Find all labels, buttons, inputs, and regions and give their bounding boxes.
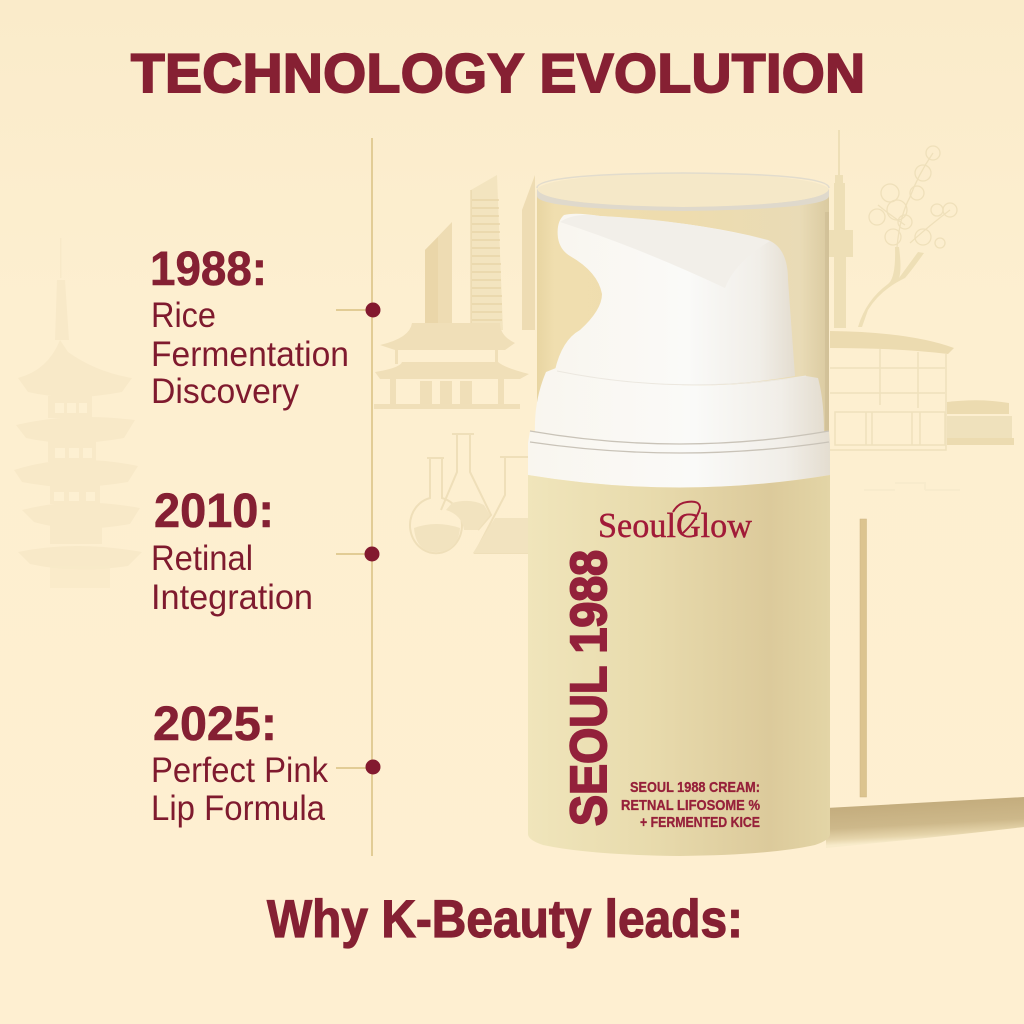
timeline entry: 2010: Retinal [151,539,253,578]
shadow of bottle [826,797,1024,848]
timeline entry: 1988: Discovery [151,372,299,411]
actuator seam [557,371,806,385]
vertical product label: SEOUL 1988 [560,550,617,826]
timeline entry: 2025: Lip Formula [151,789,325,828]
clear cap [537,173,829,445]
timeline entry: 1988: Fermentation [151,335,349,374]
silver rings [530,431,829,453]
product bottle [528,173,830,856]
timeline entry: 2010: Integration [151,578,313,617]
footer heading: Why K-Beauty leads: [267,890,743,949]
timeline entry: 1988: Rice [151,296,216,335]
title: TECHNOLOGY EVOLUTION [131,42,865,104]
timeline entry: 2025: Perfect Pink [151,751,328,790]
timeline entry: 2025 [151,698,380,828]
timeline entry: 2010 [151,485,380,617]
illustration: Seoul skyline towers [425,175,535,330]
pump actuator [555,214,795,385]
timeline entry: 1988 [150,243,380,411]
actuator top surface [560,215,770,288]
decorative vertical rod [860,519,866,797]
product description: RETNAL LIFOSOME % [621,797,760,814]
illustration: blossom tree [858,146,957,327]
pump collar [535,368,824,444]
product description: SEOUL 1988 CREAM: [630,779,760,796]
illustration: laboratory flasks [410,434,528,553]
timeline entry: 1988: 1988: [150,243,267,296]
illustration: pagoda silhouette [14,238,142,588]
product description: + FERMENTED KICE [640,814,760,831]
timeline entry: 2025: 2025: [153,698,277,751]
illustration: modern round building [830,331,1014,490]
illustration: traditional palace [374,323,529,409]
timeline axis [371,138,373,856]
cream body [528,475,830,856]
product description [621,779,760,831]
illustration: N Seoul tower [829,130,853,328]
timeline entry: 2010: 2010: [154,485,274,538]
brand logo: SeoulGlow [598,506,753,545]
white band [528,431,830,488]
